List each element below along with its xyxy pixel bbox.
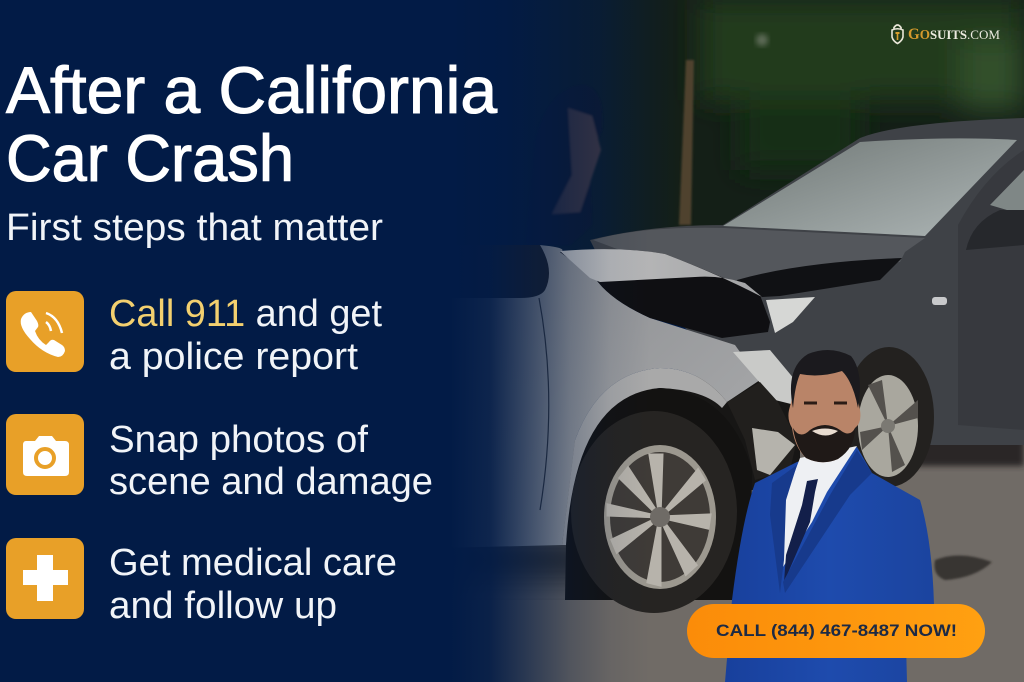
step text: Call 911 and get <box>109 293 382 335</box>
icon: camera <box>6 414 84 495</box>
wheel of dark car <box>844 347 934 487</box>
arch opening <box>565 388 752 600</box>
call to action button: CALL (844) 467-8487 NOW! <box>716 622 957 640</box>
logo: GoSuits.com <box>892 25 1000 44</box>
beard <box>793 425 855 462</box>
title: Car Crash <box>6 121 294 195</box>
logo: GoSuits.com: SUITS <box>930 28 967 42</box>
road surface <box>440 436 1024 682</box>
shirt <box>783 446 857 567</box>
title: After a California <box>6 53 497 127</box>
necktie <box>784 479 818 582</box>
step 1: call 911 <box>6 291 382 378</box>
headlight <box>733 350 795 405</box>
title <box>6 53 497 195</box>
right lapel <box>783 450 872 593</box>
icon: medical cross <box>6 538 84 619</box>
backing under bumper <box>660 370 800 490</box>
hair <box>791 350 860 408</box>
call to action button <box>687 604 985 658</box>
step 3: medical care: and follow up <box>109 585 337 627</box>
step 2: photos: scene and damage <box>109 461 433 503</box>
raised bonnet <box>560 249 770 338</box>
navy fade over photo <box>0 0 660 682</box>
door line <box>539 298 549 510</box>
silver car front wheel <box>571 411 737 613</box>
suit jacket <box>725 447 934 682</box>
dark window corner <box>440 245 549 298</box>
icon: padlock shield <box>892 25 903 44</box>
crushed bumper <box>727 382 797 480</box>
trees background <box>440 0 1024 300</box>
smile <box>812 428 838 436</box>
wheel arch band <box>562 368 727 545</box>
subtitle: First steps that matter <box>6 207 383 249</box>
silver damaged car <box>440 245 800 613</box>
step text: Get medical care <box>109 542 397 584</box>
dark grey car <box>590 118 1024 487</box>
body and fender <box>440 245 760 548</box>
icon: phone <box>6 291 84 372</box>
step 2: photos <box>6 414 433 503</box>
logo: GoSuits.com: GO <box>908 26 930 43</box>
navy haze behind cars <box>480 0 680 300</box>
photo: crash scene <box>440 0 1024 682</box>
attorney portrait <box>725 350 934 682</box>
logo: GoSuits.com: .COM <box>967 28 1000 42</box>
step 3: medical care <box>6 538 397 627</box>
eyes <box>804 402 847 404</box>
step text: Snap photos of <box>109 419 368 461</box>
head <box>788 364 860 462</box>
left lapel <box>770 465 797 593</box>
step 1: call 911: a police report <box>109 336 358 378</box>
person on phone, background <box>525 85 602 245</box>
